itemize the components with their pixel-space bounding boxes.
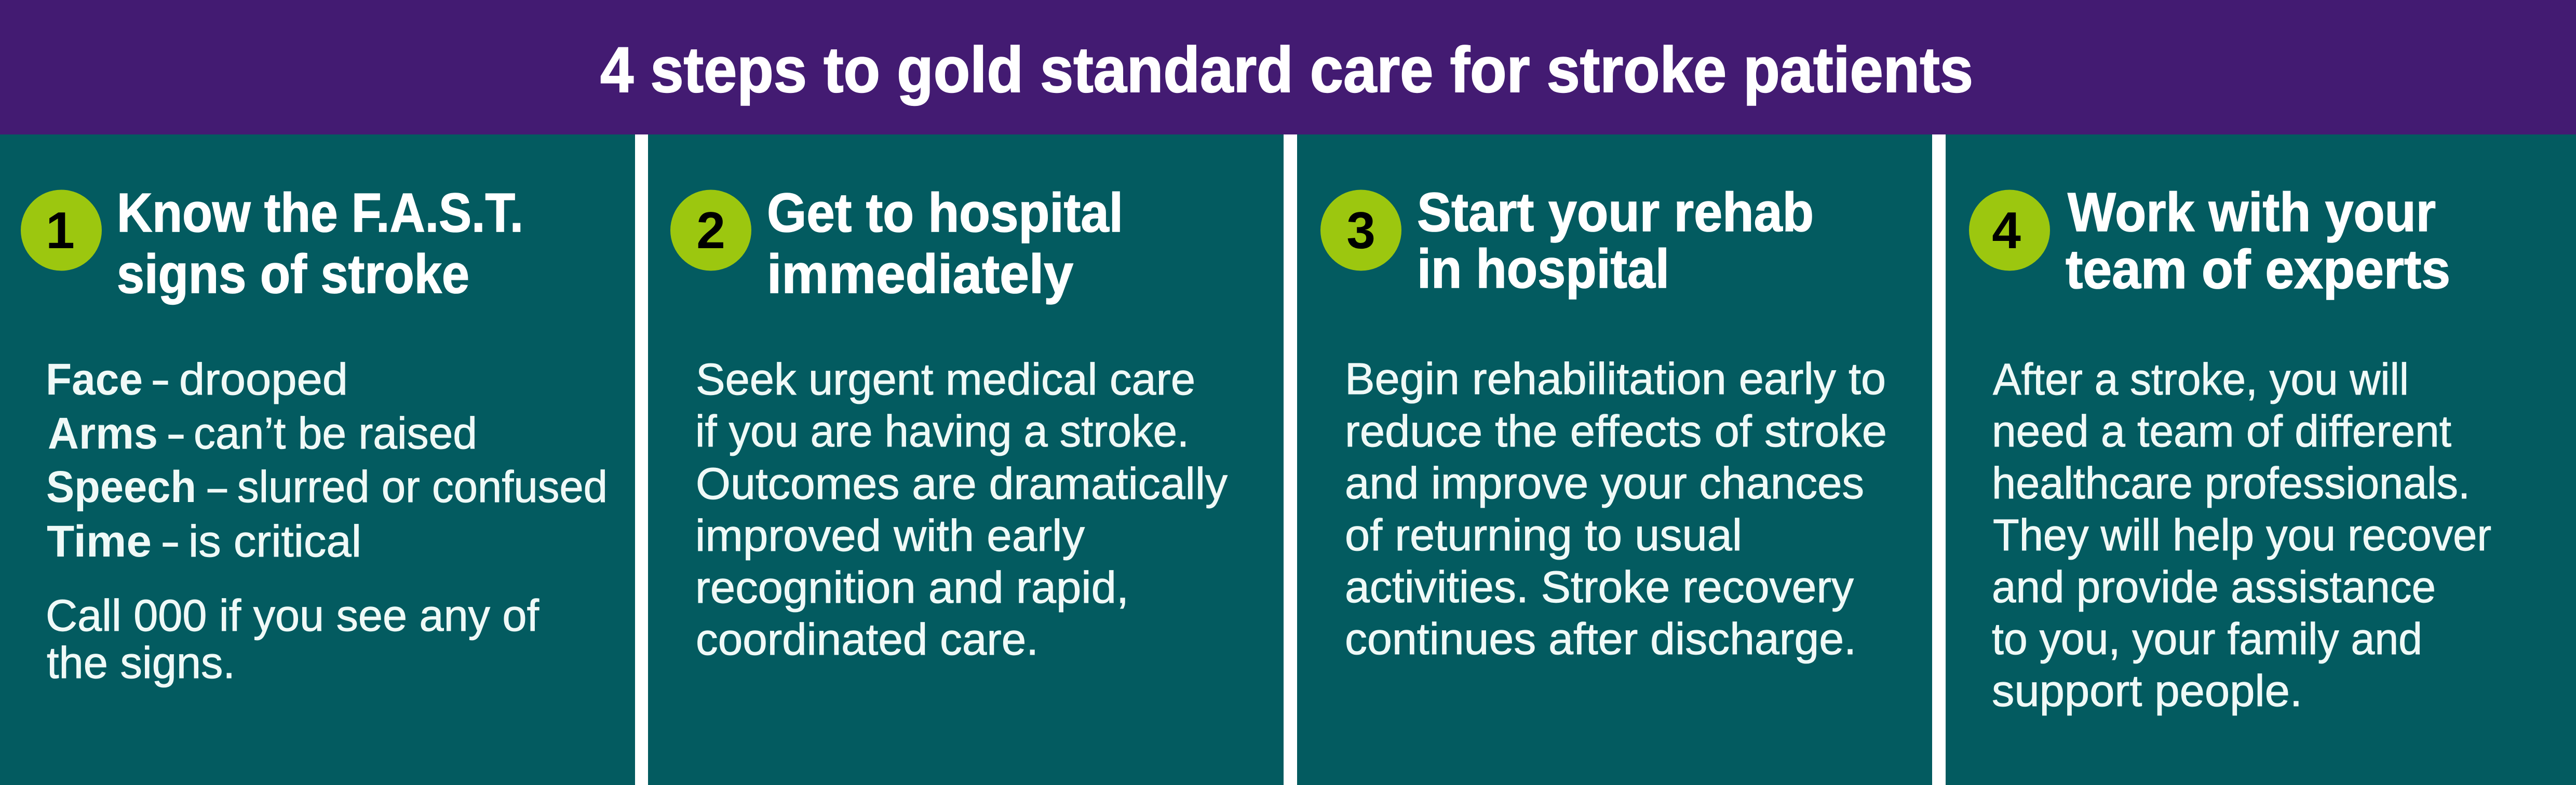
heading: step 1 bbox=[117, 182, 523, 305]
text block: step 4 body: need a team of different bbox=[1992, 407, 2451, 456]
text block: F.A.S.T. signs: drooped bbox=[179, 355, 348, 404]
text block: call 000: the signs. bbox=[47, 638, 235, 688]
text block: F.A.S.T. signs: is critical bbox=[188, 517, 361, 566]
title banner bbox=[0, 0, 2576, 134]
text block: step 3 body: and improve your chances bbox=[1345, 458, 1864, 508]
text block: step 2 body: recognition and rapid, bbox=[695, 563, 1129, 613]
panel: step 1 bbox=[21, 182, 608, 688]
text block: step 2 body: improved with early bbox=[695, 511, 1085, 561]
text block: step 4 body: and provide assistance bbox=[1992, 562, 2436, 612]
text block: F.A.S.T. signs: - bbox=[160, 517, 180, 566]
heading: step 2: Get to hospital bbox=[767, 182, 1123, 243]
text block: step 2 body: if you are having a stroke. bbox=[695, 407, 1189, 456]
text block: step 3 body: of returning to usual bbox=[1345, 510, 1742, 560]
icon: number 3 badge bbox=[1320, 190, 1401, 271]
panel: step 2 bbox=[670, 182, 1228, 665]
heading: step 4 bbox=[2066, 182, 2450, 300]
panel: step 3 bbox=[1320, 182, 1887, 664]
text block: step 2 body: coordinated care. bbox=[696, 615, 1039, 665]
icon: number 1 badge: 1 bbox=[46, 201, 75, 260]
heading: step 3: in hospital bbox=[1417, 238, 1669, 300]
text block: step 4 body: They will help you recover bbox=[1993, 510, 2491, 560]
icon: number 4 badge bbox=[1969, 190, 2050, 271]
text block: step 3 body bbox=[1345, 354, 1887, 664]
heading: step 1: signs of stroke bbox=[117, 243, 469, 305]
text block: F.A.S.T. signs: Arms bbox=[48, 409, 158, 458]
text block: step 3 body: activities. Stroke recovery bbox=[1345, 562, 1854, 612]
text block: step 3 body: continues after discharge. bbox=[1345, 614, 1856, 664]
text block: step 4 body: After a stroke, you will bbox=[1993, 355, 2409, 404]
heading: step 4: team of experts bbox=[2066, 239, 2450, 300]
heading: step 3 bbox=[1417, 182, 1814, 300]
heading: step 3: Start your rehab bbox=[1417, 182, 1814, 243]
icon: number 3 badge: 3 bbox=[1346, 201, 1375, 260]
heading: step 4: Work with your bbox=[2068, 182, 2436, 243]
icon: number 4 badge: 4 bbox=[1992, 201, 2021, 260]
text block: F.A.S.T. signs: - bbox=[151, 355, 170, 404]
text block: step 2 body bbox=[695, 355, 1228, 665]
panel: step 4 bbox=[1969, 182, 2491, 716]
text block: F.A.S.T. signs: Time bbox=[47, 517, 152, 566]
text block: F.A.S.T. signs: Face bbox=[46, 355, 143, 404]
text block: step 4 body bbox=[1992, 355, 2491, 716]
title: 4 steps to gold standard care for stroke patients bbox=[600, 34, 1973, 106]
text block: step 4 body: support people. bbox=[1992, 666, 2302, 716]
heading: step 1: Know the F.A.S.T. bbox=[117, 182, 523, 243]
icon: number 2 badge: 2 bbox=[696, 201, 725, 260]
text block: step 2 body: Outcomes are dramatically bbox=[696, 459, 1228, 509]
text block: F.A.S.T. signs: – bbox=[208, 462, 227, 512]
text block: F.A.S.T. signs: slurred or confused bbox=[237, 462, 608, 512]
heading: step 2 bbox=[767, 182, 1123, 305]
heading: step 2: immediately bbox=[767, 243, 1073, 305]
icon: number 1 badge bbox=[21, 190, 102, 271]
text block: F.A.S.T. signs: - bbox=[166, 409, 186, 458]
text block: step 3 body: reduce the effects of stroke bbox=[1345, 407, 1887, 456]
text block: F.A.S.T. signs bbox=[46, 355, 608, 566]
text block: F.A.S.T. signs: Speech bbox=[46, 462, 196, 512]
text block: F.A.S.T. signs: can’t be raised bbox=[194, 409, 477, 458]
text block: step 3 body: Begin rehabilitation early to bbox=[1345, 354, 1886, 404]
text block: step 4 body: healthcare professionals. bbox=[1992, 458, 2470, 508]
text block: step 2 body: Seek urgent medical care bbox=[696, 355, 1195, 404]
icon: number 2 badge bbox=[670, 190, 751, 271]
text block: call 000 bbox=[46, 591, 540, 688]
text block: call 000: Call 000 if you see any of bbox=[46, 591, 540, 641]
text block: step 4 body: to you, your family and bbox=[1992, 614, 2422, 664]
